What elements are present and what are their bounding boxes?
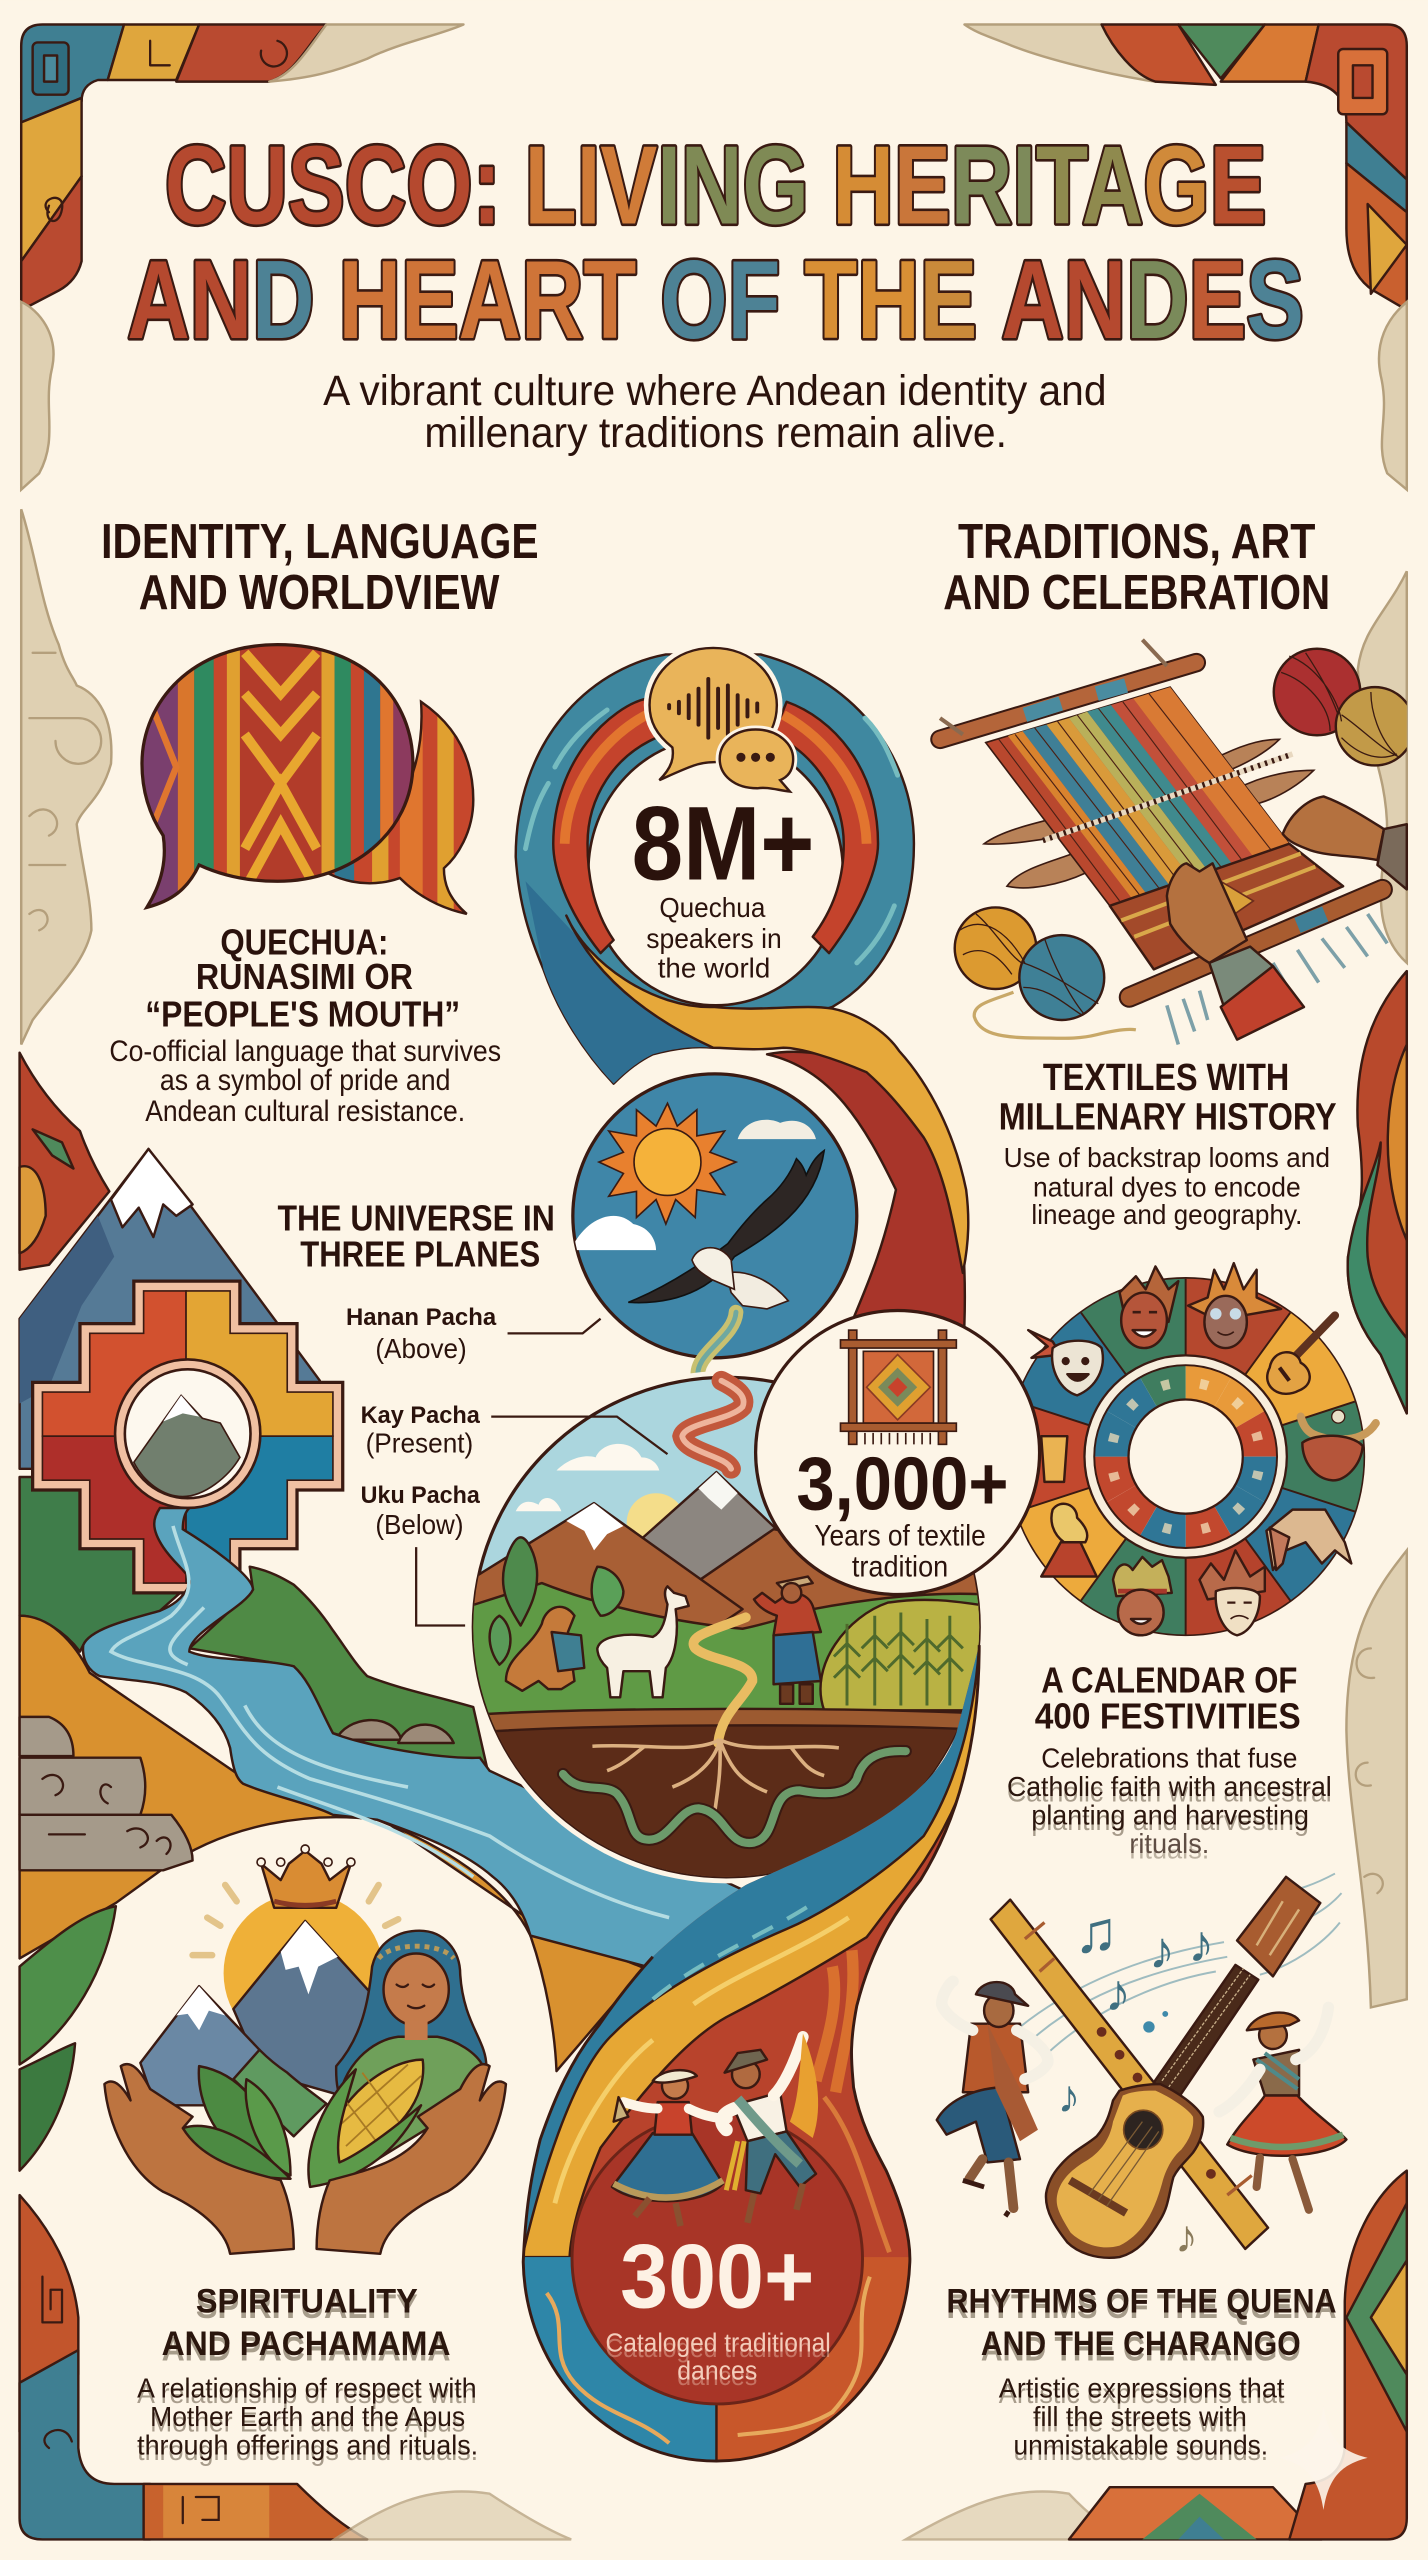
label: Hanan Pacha: Hanan Pacha	[346, 1304, 497, 1331]
central ribbon: yellow strand	[566, 916, 968, 1273]
heading: the universe in three planes	[277, 1199, 555, 1274]
text: calendar of festivities: planting and harvesting	[1031, 1800, 1309, 1831]
outer sectors	[991, 1262, 1381, 1651]
icon: corn	[308, 2060, 423, 2187]
hand on loom	[1167, 863, 1247, 963]
text: quechua	[109, 923, 501, 1128]
shed rods	[984, 739, 1279, 844]
text: rhythms: unmistakable sounds.	[1013, 2430, 1268, 2461]
text: calendar of festivities: 400 FESTIVITIES	[1035, 1696, 1301, 1736]
icon: earth mother	[336, 1931, 486, 2171]
text: quechua: QUECHUA:	[220, 923, 388, 963]
frame: bottom border	[144, 2484, 1322, 2539]
stat: 300+ dances: dances	[677, 2355, 757, 2385]
icon: charango	[1046, 1877, 1320, 2258]
icon: right hand	[317, 2064, 506, 2254]
mask: white upper left	[1028, 1330, 1103, 1395]
icon: trees	[503, 1537, 537, 1625]
snake	[563, 1751, 906, 1843]
icon: small loom	[840, 1330, 956, 1444]
title: CUSCO: LIVING HERITAGE	[165, 124, 1266, 248]
music notes: ♪	[1175, 2211, 1198, 2262]
mask: feathered red	[1120, 1266, 1178, 1348]
text: quechua: RUNASIMI OR	[196, 957, 413, 997]
woman dancer	[612, 2133, 723, 2201]
subtitle	[323, 367, 1106, 456]
green ground	[465, 1583, 987, 1730]
illustration: couple of dancers	[612, 2033, 818, 2226]
cup	[1041, 1436, 1067, 1482]
icon: farmer woman	[754, 1593, 821, 1635]
central ribbon: lower drop	[490, 1645, 989, 2469]
small guitar	[1267, 1315, 1335, 1394]
label: Uku Pacha: (Below)	[375, 1509, 463, 1540]
text: textiles: MILLENARY HISTORY	[999, 1095, 1337, 1137]
text: textiles	[999, 1056, 1337, 1230]
illustration: quena and charango	[937, 1874, 1346, 2262]
icon: yarn balls lower left	[955, 907, 1136, 1038]
text: textiles: TEXTILES WITH	[1043, 1056, 1289, 1098]
label: Uku Pacha	[361, 1482, 480, 1625]
music staff lines	[1020, 1874, 1342, 2053]
text: rhythms: RHYTHMS OF THE QUENA	[947, 2283, 1337, 2321]
frame: sand carved side strips	[21, 302, 1407, 2007]
text: calendar of festivities: A CALENDAR OF	[1041, 1660, 1297, 1700]
text: spirituality: A relationship of respect with	[137, 2372, 477, 2403]
icon: yarn balls upper right	[1274, 649, 1414, 765]
text: spirituality: Mother Earth and the Apus	[150, 2401, 465, 2432]
chakana emblem	[33, 1281, 343, 1593]
title	[127, 124, 1304, 362]
warp threads	[986, 687, 1289, 906]
stat: 8M+: 8M+	[632, 786, 814, 903]
icon: carved stones	[20, 1717, 193, 1870]
icon: gold speech bubbles	[650, 648, 793, 792]
heading: identity, language and worldview	[101, 515, 539, 620]
river	[83, 1508, 767, 1968]
central ribbon: red strand	[767, 1052, 965, 1355]
mask: feather headdress bottom left	[1113, 1557, 1172, 1635]
dancing figure	[1266, 1510, 1351, 1570]
circle: three worlds scene	[465, 1371, 996, 1893]
title: AND HEART OF THE ANDES	[127, 238, 1304, 362]
smoke: rainbow link between circles	[698, 1312, 736, 1379]
sun	[224, 1893, 384, 2053]
text: quechua: “PEOPLE'S MOUTH”	[145, 995, 460, 1035]
text: quechua: as a symbol of pride and	[160, 1064, 450, 1097]
text: spirituality	[137, 2283, 478, 2461]
text: textiles: natural dyes to encode	[1033, 1171, 1301, 1202]
sun rays	[193, 1885, 398, 1955]
circle: upper world eagle and sun	[571, 1072, 858, 1360]
label: Hanan Pacha: (Above)	[375, 1333, 467, 1364]
stat circle: 3,000+ years	[756, 1311, 1040, 1594]
icon: crops	[834, 1612, 963, 1705]
mask: blue feathered	[1188, 1263, 1281, 1348]
golden path and roots	[693, 1617, 752, 1743]
top bar	[940, 663, 1196, 739]
icon: left hand	[104, 2064, 294, 2254]
icon: quena flute	[991, 1900, 1268, 2249]
stat: 300+ dances: Cataloged traditional	[605, 2328, 831, 2358]
heading: traditions, art and celebration: TRADITIONS, ART	[958, 515, 1315, 569]
chart: festival calendar wheel	[991, 1262, 1381, 1651]
subtitle: A vibrant culture where Andean identity and	[323, 367, 1106, 414]
frame: lower-right band	[1289, 2171, 1407, 2539]
icon: woven speech bubbles	[139, 640, 481, 922]
icon: backstrap loom	[940, 640, 1407, 1045]
text: rhythms	[947, 2283, 1337, 2461]
heading: identity, language and worldview: AND WORLDVIEW	[139, 566, 500, 620]
label: Kay Pacha: Kay Pacha	[361, 1402, 480, 1429]
frame: right ribbon band	[1348, 971, 1407, 1413]
inner white disc	[588, 738, 843, 1005]
text: rhythms: fill the streets with	[1033, 2401, 1247, 2432]
stat: 8M+: Quechua	[659, 892, 766, 923]
yellow figure	[1041, 1504, 1097, 1577]
bottom bar	[1129, 889, 1382, 997]
note dots	[1143, 2011, 1168, 2033]
frame: top-left woven border	[21, 25, 463, 310]
music notes	[1058, 1900, 1214, 2262]
stat: 8M+: speakers in	[646, 923, 782, 954]
text: spirituality: through offerings and rituals.	[137, 2430, 478, 2461]
mask: pale bottom right	[1200, 1550, 1265, 1635]
heading: the universe in three planes: THREE PLANES	[300, 1234, 540, 1274]
icon: corner sparkle	[1279, 2406, 1368, 2510]
label: Kay Pacha: (Present)	[366, 1428, 473, 1459]
hand on right	[1283, 796, 1384, 860]
stat ring: 8M+ speakers	[516, 654, 914, 1084]
heading: traditions, art and celebration: AND CELEBRATION	[943, 566, 1330, 620]
landscape: hills	[20, 1477, 645, 2071]
music notes: ♫	[1074, 1900, 1118, 1965]
text: rhythms: Artistic expressions that	[999, 2372, 1285, 2403]
text: quechua: Andean cultural resistance.	[145, 1095, 465, 1128]
frame: top-right woven border	[965, 25, 1407, 310]
icon: female dancer	[1219, 2007, 1346, 2210]
text: spirituality: AND PACHAMAMA	[162, 2325, 450, 2363]
label: Uku Pacha: Uku Pacha	[361, 1482, 480, 1509]
text: calendar of festivities: Catholic faith with ancestral	[1007, 1771, 1332, 1802]
blue ribbon ring	[516, 654, 914, 1084]
text: calendar of festivities: rituals.	[1129, 1828, 1209, 1859]
inner ring segments	[1084, 1355, 1287, 1558]
text: calendar of festivities: Celebrations that fuse	[1041, 1742, 1297, 1773]
stat: 300+ dances: 300+	[620, 2226, 814, 2328]
festival masks	[1028, 1263, 1376, 1635]
frame: lower-left band	[20, 2195, 150, 2539]
stat circle: 3,000+ years: Years of textile	[814, 1520, 986, 1553]
smoke: red plume above peak	[682, 1381, 744, 1469]
mask: horned	[1301, 1410, 1376, 1480]
orange-red arcs	[553, 699, 664, 953]
soil	[488, 1708, 962, 1877]
mountains	[642, 1470, 776, 1578]
string heddle	[1043, 754, 1293, 841]
yellow field	[820, 1600, 987, 1710]
music notes: ♪	[1188, 1916, 1214, 1974]
mountains	[233, 1921, 375, 2105]
icon: male dancer	[937, 1981, 1048, 2216]
landscape: red ribbon and mountain	[20, 1053, 320, 1469]
icon: brown alpaca	[506, 1607, 574, 1691]
stat: 300+ dances	[605, 2226, 831, 2385]
music notes: ♪	[1105, 1965, 1131, 2023]
text: calendar of festivities	[1007, 1660, 1332, 1859]
text: textiles: lineage and geography.	[1031, 1199, 1302, 1230]
icon: snow mountain	[20, 1149, 320, 1469]
label: Kay Pacha	[361, 1402, 667, 1459]
heading: identity, language and worldview: IDENTITY, LANGUAGE	[101, 515, 539, 569]
icon: coca leaves	[183, 2066, 290, 2179]
label: Hanan Pacha	[346, 1304, 601, 1364]
text: quechua: Co-official language that survives	[109, 1035, 501, 1068]
text: textiles: Use of backstrap looms and	[1004, 1142, 1330, 1173]
stat: 8M+	[632, 786, 814, 984]
illustration: Pachamama hands	[104, 1845, 506, 2254]
music notes: ♪	[1058, 2071, 1080, 2122]
stat: 8M+: the world	[658, 953, 770, 984]
man dancer	[733, 2092, 787, 2141]
stat circle: 3,000+ years: 3,000+	[796, 1442, 1009, 1526]
icon: eagle	[628, 1151, 824, 1303]
heading: the universe in three planes: THE UNIVERSE IN	[277, 1199, 555, 1239]
icon: llama	[597, 1586, 689, 1697]
music notes: ♪	[1149, 1922, 1175, 1980]
landscape: rocks by the river	[336, 1720, 454, 1743]
woven band	[1110, 844, 1343, 969]
icon: crown	[257, 1845, 355, 1908]
heading: traditions, art and celebration	[943, 515, 1330, 620]
text: rhythms: AND THE CHARANGO	[981, 2325, 1301, 2363]
icon: sun	[599, 1103, 736, 1224]
text: spirituality: SPIRITUALITY	[196, 2283, 418, 2321]
fringes	[1167, 914, 1387, 1045]
left frame: leaves	[20, 1906, 116, 2171]
stat circle: 3,000+ years: tradition	[852, 1551, 948, 1584]
subtitle: millenary traditions remain alive.	[424, 409, 1007, 456]
